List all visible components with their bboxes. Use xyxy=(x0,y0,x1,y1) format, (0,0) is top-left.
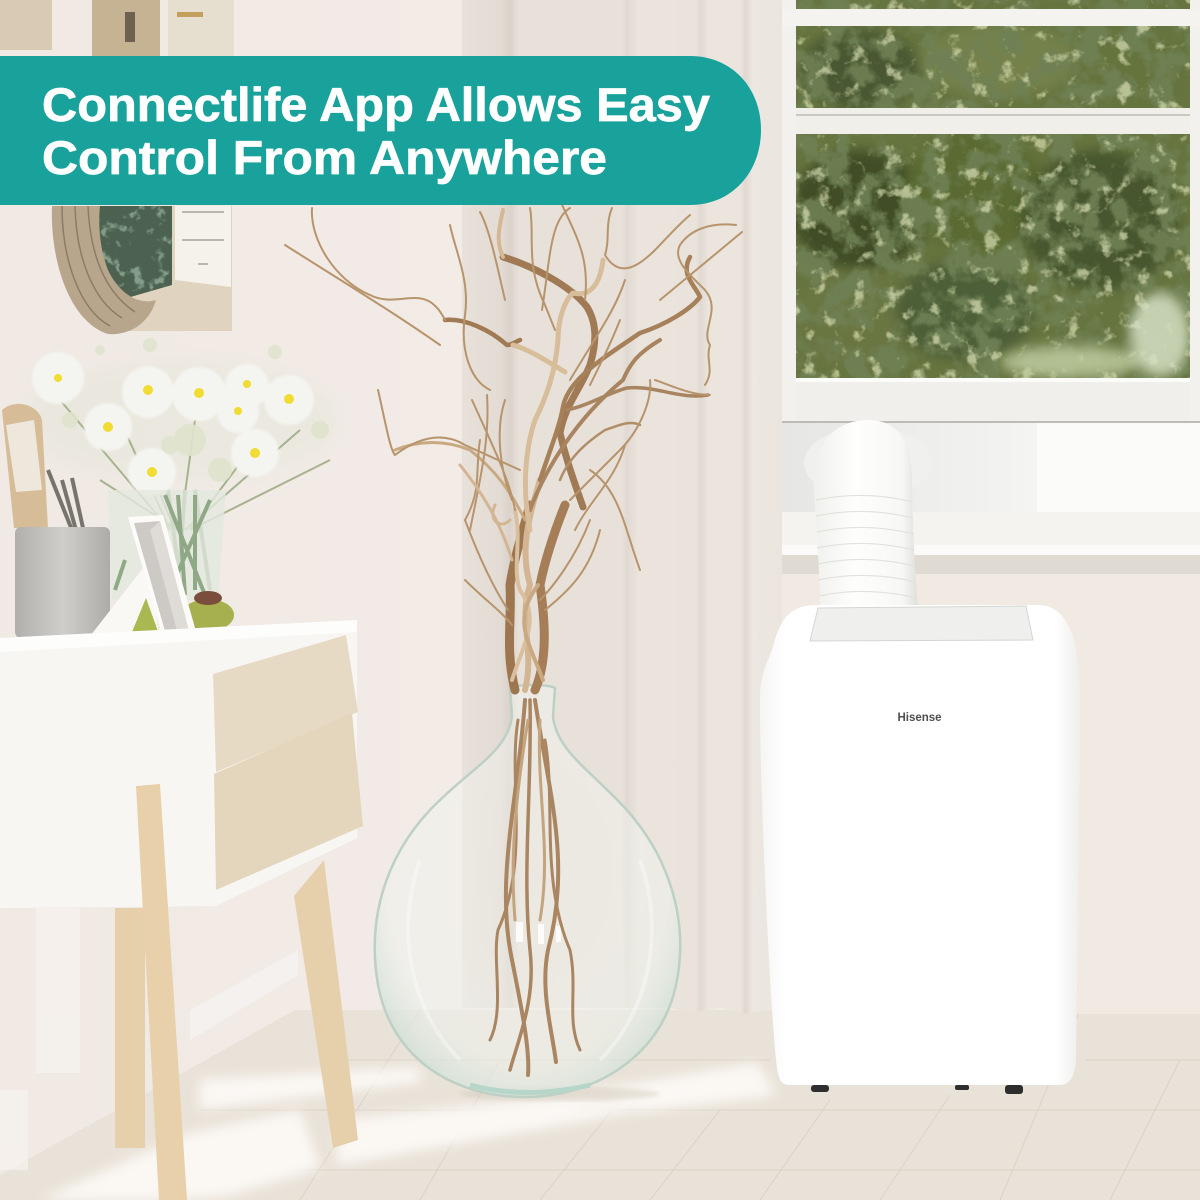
light branches xyxy=(525,260,603,530)
flower bouquet xyxy=(22,338,338,590)
dried branches above vase xyxy=(285,200,742,690)
brand logo: Hisense xyxy=(897,712,942,724)
window glass with tree foliage xyxy=(790,0,1190,378)
window frame and wall under window xyxy=(782,0,1200,1014)
window sash bars xyxy=(782,0,1200,421)
thin branches xyxy=(285,200,742,625)
heading: Control From Anywhere xyxy=(42,131,607,184)
air conditioner body xyxy=(760,605,1080,1085)
picture frame and succulent xyxy=(87,515,234,645)
air conditioner top panel xyxy=(810,606,1033,641)
wall frames top-left xyxy=(0,0,234,56)
exhaust hose xyxy=(814,420,918,610)
glass vase xyxy=(375,685,680,1101)
twisted trunk xyxy=(509,480,565,690)
branches inside vase xyxy=(490,700,580,1075)
wall skirting xyxy=(190,950,298,1040)
wreath and wall board xyxy=(52,206,232,334)
banner xyxy=(0,56,761,205)
hair brush and pencils xyxy=(2,404,83,530)
heavy branches xyxy=(503,257,595,507)
air conditioner wheels xyxy=(811,1085,1023,1094)
glass flower vase xyxy=(108,490,226,600)
grey cup xyxy=(15,527,110,638)
portable air conditioner xyxy=(760,605,1080,1094)
white side table with wooden legs xyxy=(0,620,363,1200)
lower-left wall light streaks xyxy=(0,908,80,1170)
sunlight patches xyxy=(40,1063,776,1200)
floor xyxy=(0,1010,1200,1200)
curtain xyxy=(462,0,782,1014)
heading: Connectlife App Allows Easy xyxy=(42,78,710,131)
window wall flange xyxy=(804,427,932,499)
